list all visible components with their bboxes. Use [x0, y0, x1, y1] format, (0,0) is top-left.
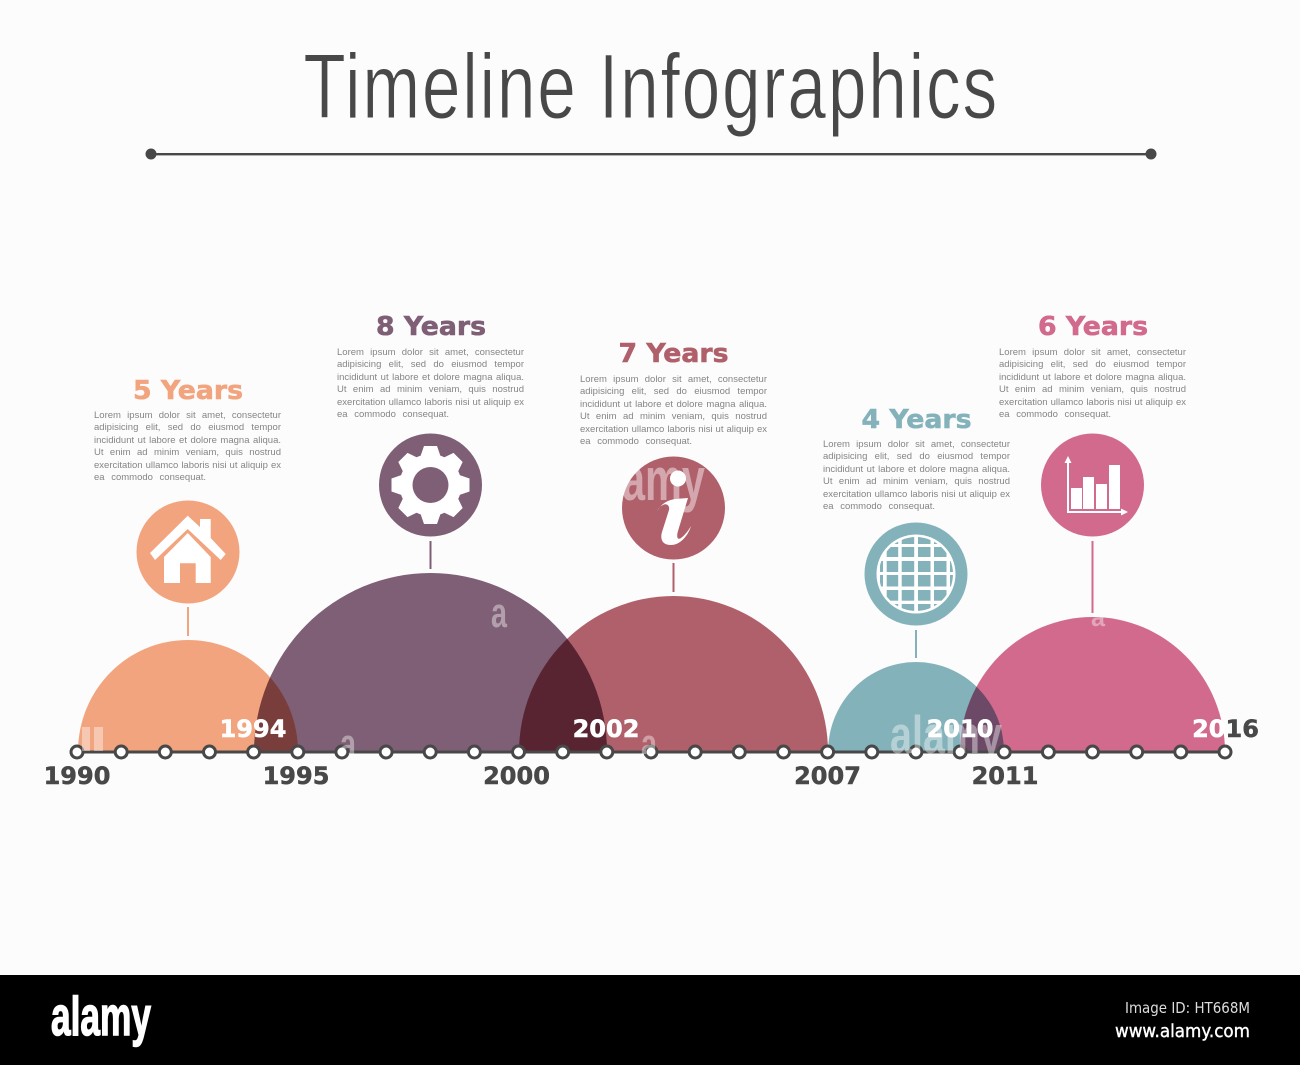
text block: 7 years: adipisicing elit, sed do eiusmod tempor [580, 386, 767, 397]
lower year labels: 2011 [972, 762, 1038, 790]
watermark on info icon: amy [622, 446, 705, 513]
semicircle: 8 years [254, 573, 607, 752]
text block: 7 years: exercitation ullamco laboris nisi ut aliquip ex [580, 424, 767, 435]
text block: 5 years: Ut enim ad minim veniam, quis nostrud [94, 447, 281, 458]
text block: 8 years: Ut enim ad minim veniam, quis nostrud [337, 384, 524, 395]
website: www.alamy.com [1115, 1021, 1250, 1042]
text block: 6 years: Lorem ipsum dolor sit amet, consectetur [999, 347, 1186, 358]
connector stems [188, 541, 1092, 658]
lower year labels: 1995 [263, 762, 329, 790]
upper year labels: 1994 [220, 715, 286, 743]
text block: 6 years: adipisicing elit, sed do eiusmod tempor [999, 359, 1186, 370]
semicircle: 6 years [960, 617, 1225, 752]
text block: 7 years: ea commodo consequat. [580, 436, 692, 447]
text block: 5 years [94, 410, 281, 483]
semicircle: 7 years [519, 596, 828, 752]
image id: Image ID: HT668M [1125, 999, 1250, 1017]
text block: 5 years: adipisicing elit, sed do eiusmod tempor [94, 422, 281, 433]
icon: globe [864, 522, 968, 626]
footer logo: alamy [51, 985, 151, 1047]
text block: 8 years: Lorem ipsum dolor sit amet, consectetur [337, 347, 524, 358]
text block: 7 years: Ut enim ad minim veniam, quis nostrud [580, 411, 767, 422]
icon: gear [379, 434, 482, 536]
text block: 4 years: ea commodo consequat. [823, 501, 935, 512]
lower year labels: 2007 [794, 762, 861, 790]
timeline axis [71, 746, 1231, 758]
icon: house [136, 500, 240, 604]
text block: 8 years: adipisicing elit, sed do eiusmod tempor [337, 359, 524, 370]
heading: 8 years: 8 Years [376, 312, 486, 342]
year labels [44, 715, 1259, 790]
semicircle: 5 years [78, 640, 298, 752]
heading: 5 years: 5 Years [133, 376, 243, 406]
watermarks: alamy [890, 706, 1002, 765]
text block: 5 years: exercitation ullamco laboris nisi ut aliquip ex [94, 460, 281, 471]
footer bar [0, 975, 1300, 1065]
upper year labels [220, 715, 1259, 743]
text block: 5 years: incididunt ut labore et dolore magna aliqua. [94, 435, 281, 446]
text block: 4 years: incididunt ut labore et dolore magna aliqua. [823, 464, 1010, 475]
headings [133, 312, 1148, 435]
text block: 4 years: Ut enim ad minim veniam, quis nostrud [823, 476, 1010, 487]
text block: 8 years [337, 347, 524, 420]
title: Timeline Infographics [304, 35, 999, 138]
heading: 4 years: 4 Years [862, 405, 972, 435]
semicircle: 4 years [828, 662, 1004, 752]
watermarks: a [1091, 602, 1106, 632]
semicircles [78, 573, 1225, 752]
text block: 5 years: Lorem ipsum dolor sit amet, consectetur [94, 410, 281, 421]
text block: 8 years: ea commodo consequat. [337, 409, 449, 420]
text block: 7 years: incididunt ut labore et dolore magna aliqua. [580, 399, 767, 410]
watermarks: a [491, 589, 507, 636]
lower year labels: 2000 [483, 762, 550, 790]
lower year labels: 1990 [44, 762, 110, 790]
text block: 4 years: adipisicing elit, sed do eiusmod tempor [823, 451, 1010, 462]
text block: 7 years: Lorem ipsum dolor sit amet, consectetur [580, 374, 767, 385]
text block: 7 years [580, 374, 767, 447]
heading: 6 years: 6 Years [1038, 312, 1148, 342]
watermarks: a [641, 720, 657, 767]
text block: 6 years: ea commodo consequat. [999, 409, 1111, 420]
lower year labels [44, 762, 1038, 790]
upper year labels: 2002 [573, 715, 639, 743]
text block: 8 years: exercitation ullamco laboris nisi ut aliquip ex [337, 397, 524, 408]
text block: 6 years: incididunt ut labore et dolore magna aliqua. [999, 372, 1186, 383]
upper year labels: 2010 [927, 715, 993, 743]
upper year labels: 2016 [1192, 715, 1259, 743]
text block: 4 years: Lorem ipsum dolor sit amet, consectetur [823, 439, 1010, 450]
text block: 6 years: exercitation ullamco laboris nisi ut aliquip ex [999, 397, 1186, 408]
title underline [146, 148, 1156, 160]
text block: 5 years: ea commodo consequat. [94, 472, 206, 483]
text block: 8 years: incididunt ut labore et dolore magna aliqua. [337, 372, 524, 383]
text block: 4 years: exercitation ullamco laboris nisi ut aliquip ex [823, 489, 1010, 500]
icon: bar chart [1041, 434, 1144, 536]
icon: info [622, 446, 725, 560]
text block: 6 years [999, 347, 1186, 420]
text block: 4 years [823, 439, 1010, 512]
text block: 6 years: Ut enim ad minim veniam, quis nostrud [999, 384, 1186, 395]
watermarks [82, 604, 1106, 754]
watermarks: a [340, 720, 356, 767]
heading: 7 years: 7 Years [618, 339, 728, 369]
